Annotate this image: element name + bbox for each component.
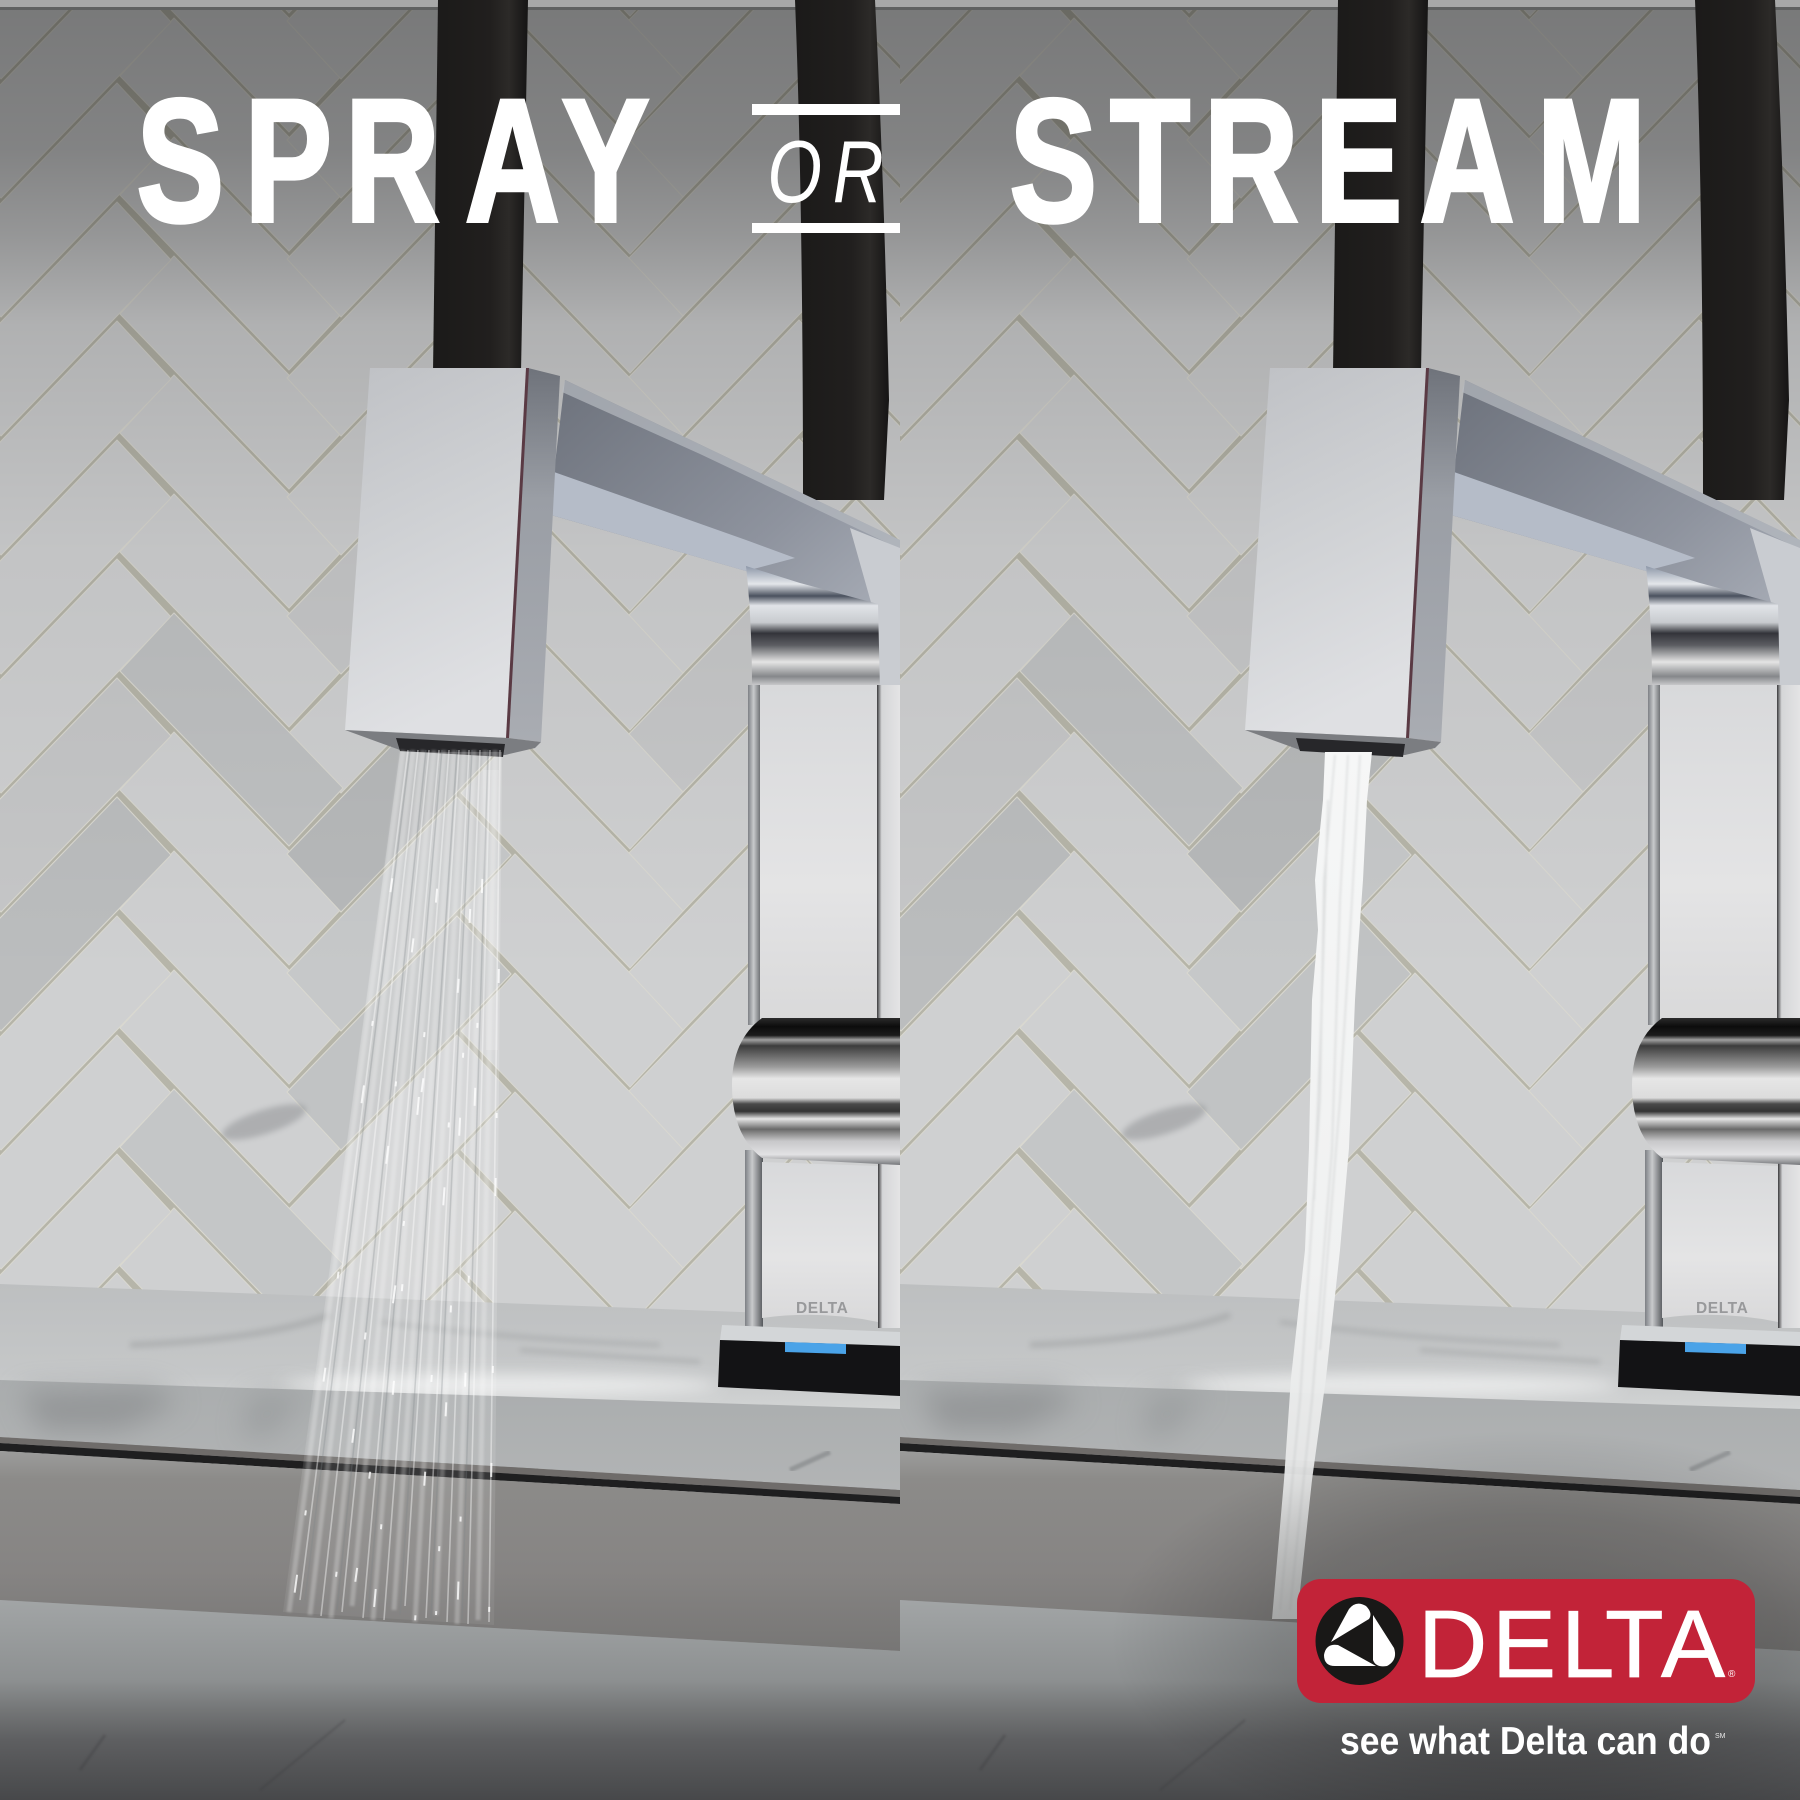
faucet stamp: DELTA (1696, 1300, 1748, 1317)
tagline: SM (1715, 1733, 1726, 1740)
faucet stamp: DELTA (796, 1300, 848, 1317)
icon: Delta triangle mark (1316, 1597, 1404, 1685)
tagline: see what Delta can do (1340, 1720, 1711, 1763)
kitchen scene: backsplash, faucet, counter (0, 0, 1025, 1800)
shading behind logo (1100, 1420, 1800, 1800)
panel: stream side (847, 0, 1800, 1800)
title: STREAM: STREAM (1010, 63, 1646, 258)
kitchen scene: backsplash, faucet, counter (847, 0, 1800, 1800)
divider label: OR between rules: OR (767, 122, 884, 221)
registered mark: ® (1728, 1669, 1736, 1680)
logo: Delta badge (1297, 1579, 1755, 1703)
spray water (283, 750, 502, 1625)
divider label: OR between rules (752, 104, 900, 233)
title: SPRAY: SPRAY (136, 63, 649, 258)
stream water (1272, 752, 1372, 1619)
wordmark: DELTA (1418, 1591, 1725, 1698)
panel: spray side (0, 0, 1025, 1800)
